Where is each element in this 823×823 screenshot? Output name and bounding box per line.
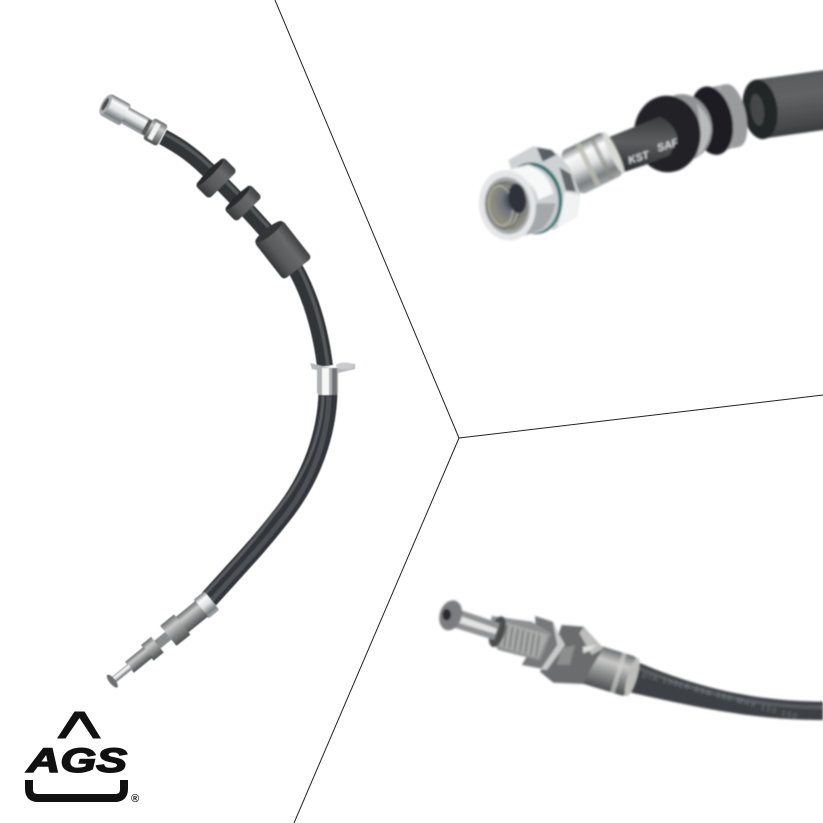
- rubber grommet one: [194, 156, 237, 199]
- teal seal ring: [499, 158, 568, 239]
- rear grommet: [684, 79, 753, 159]
- rubber sleeve: [252, 218, 312, 280]
- front grommet: [631, 90, 717, 175]
- logo bottom bracket: [29, 780, 124, 798]
- crimped collar: [559, 129, 628, 196]
- large rubber sleeve: [739, 70, 823, 141]
- upper chrome fitting: [96, 92, 168, 146]
- hose body lower: [205, 392, 329, 601]
- plunger pin: [435, 597, 500, 640]
- panel dividing lines: [275, 0, 823, 823]
- metal clamp bracket: [310, 362, 355, 395]
- fitting barrel: [490, 161, 564, 240]
- hose segment: [603, 117, 677, 173]
- logo wordmark: AGS: [26, 742, 127, 780]
- AGS logo: [26, 712, 139, 805]
- hose lettering: DIA 100LF 55S 150 MAX 150 150: [641, 671, 798, 721]
- hose markings: KST: [627, 149, 652, 167]
- hose markings second: SAF: [656, 137, 680, 155]
- hex nut: [508, 146, 580, 230]
- full brake hose: [96, 92, 355, 693]
- hose body upper: [163, 134, 328, 366]
- hose segment: [627, 662, 823, 720]
- threaded barrel: [485, 614, 552, 661]
- registered mark: ®: [131, 793, 139, 805]
- rubber grommet two: [223, 183, 262, 222]
- logo top chevron: [57, 712, 101, 738]
- fitting end face: [474, 166, 540, 244]
- crimp collar: [574, 641, 643, 698]
- lower steel fitting: [102, 590, 220, 693]
- large hex nut: [540, 625, 603, 684]
- detail: lower hose end: [435, 597, 823, 721]
- detail: upper hose end: [474, 70, 823, 244]
- small hex nut: [522, 616, 575, 670]
